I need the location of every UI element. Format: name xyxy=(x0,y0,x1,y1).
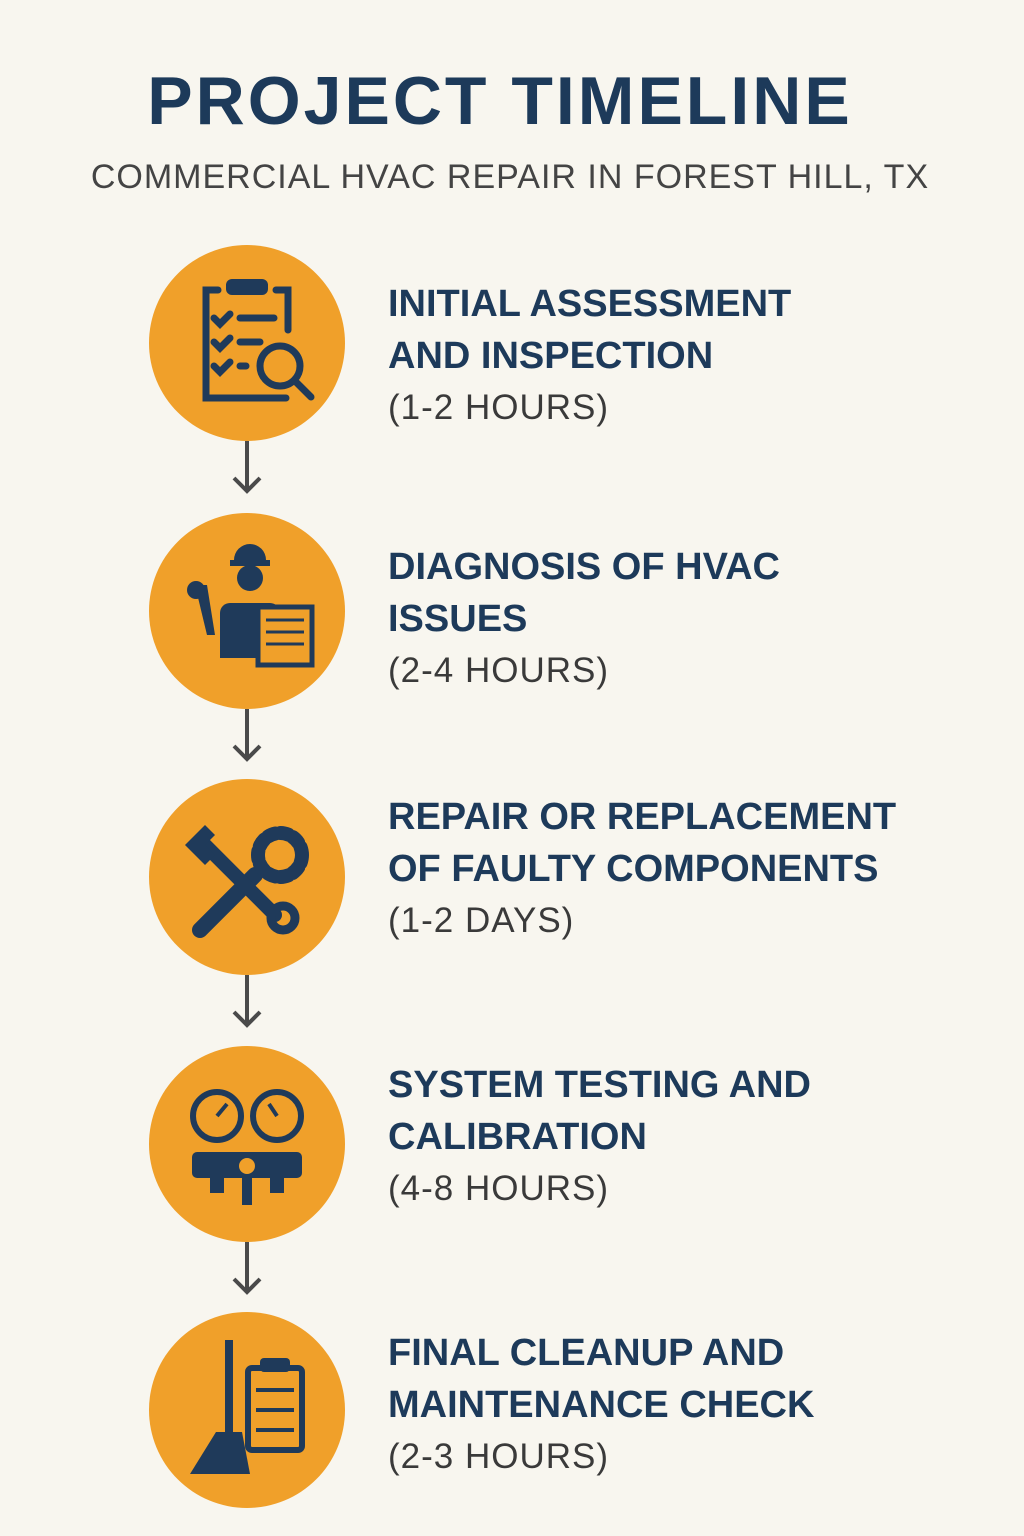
step 4 text: SYSTEM TESTING AND xyxy=(388,1064,811,1106)
step 4 text xyxy=(388,1064,811,1208)
subtitle: COMMERCIAL HVAC REPAIR IN FOREST HILL, TX xyxy=(91,158,929,196)
arrow 3 xyxy=(234,975,260,1025)
title: PROJECT TIMELINE xyxy=(147,63,853,139)
step 2 text: (2-4 HOURS) xyxy=(388,651,609,690)
step 5 text: MAINTENANCE CHECK xyxy=(388,1384,814,1426)
step 5 icon xyxy=(149,1312,345,1508)
step 2 text: DIAGNOSIS OF HVAC xyxy=(388,546,780,588)
step 4 text: (4-8 HOURS) xyxy=(388,1169,609,1208)
step 2 text: ISSUES xyxy=(388,598,527,640)
arrow 1 xyxy=(234,441,260,491)
step 4 text: CALIBRATION xyxy=(388,1116,647,1158)
step 3 text xyxy=(388,796,896,940)
step 1 icon xyxy=(149,245,345,441)
step 4 icon xyxy=(149,1046,345,1242)
step 3 text: OF FAULTY COMPONENTS xyxy=(388,848,878,890)
step 3 icon xyxy=(149,779,345,975)
step 1 text: (1-2 HOURS) xyxy=(388,388,609,427)
step 1 text: AND INSPECTION xyxy=(388,335,713,377)
arrow 2 xyxy=(234,709,260,759)
step 1 text xyxy=(388,283,791,427)
step 5 text: (2-3 HOURS) xyxy=(388,1437,609,1476)
step 3 text: (1-2 DAYS) xyxy=(388,901,574,940)
step 1 text: INITIAL ASSESSMENT xyxy=(388,283,791,325)
step 3 text: REPAIR OR REPLACEMENT xyxy=(388,796,896,838)
step 5 text xyxy=(388,1332,814,1476)
step 5 text: FINAL CLEANUP AND xyxy=(388,1332,784,1374)
arrow 4 xyxy=(234,1242,260,1292)
step 2 icon xyxy=(149,513,345,709)
step 2 text xyxy=(388,546,780,690)
